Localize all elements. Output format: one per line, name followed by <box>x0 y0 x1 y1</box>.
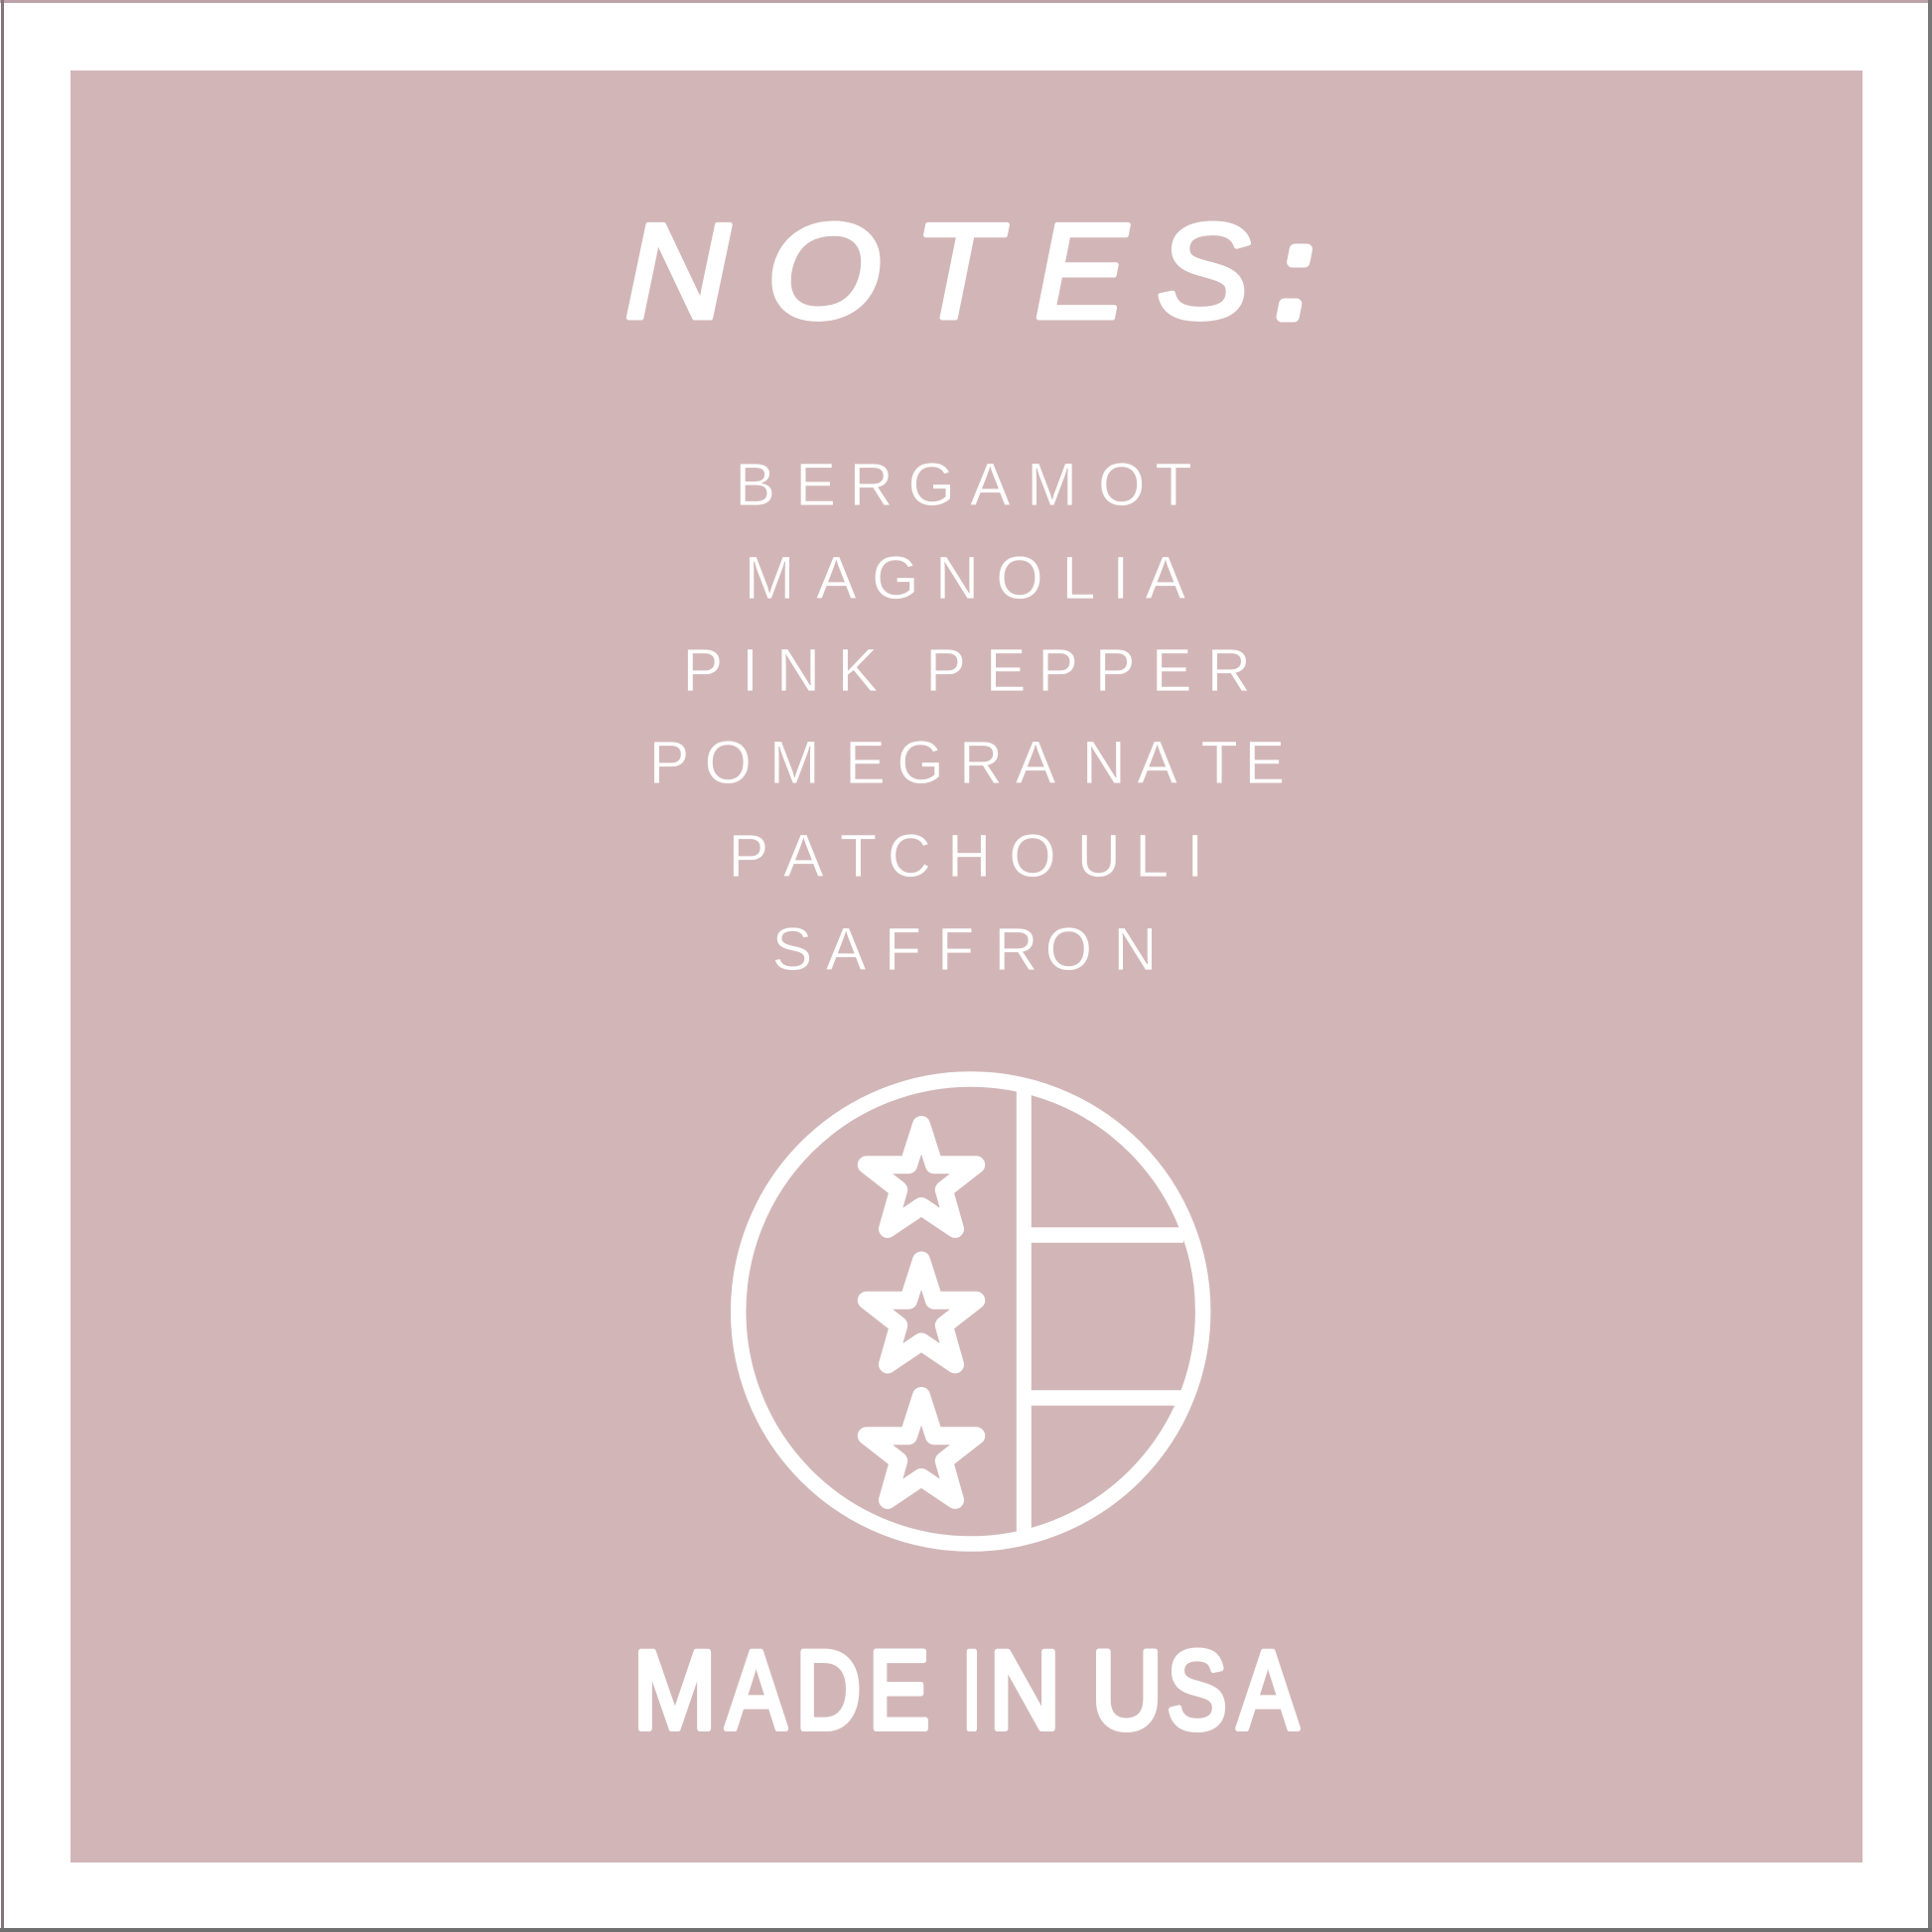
heading: NOTES: : <box>1277 203 1312 345</box>
text block: list of notes: SAFFRON <box>772 915 1157 983</box>
label: MADE IN USA: S <box>1167 1628 1227 1752</box>
heading: NOTES: E <box>1035 196 1128 346</box>
icon: USA flag in a circle <box>739 1079 1203 1544</box>
heading: NOTES: S <box>1157 196 1250 346</box>
label: MADE IN USA: M <box>632 1628 717 1752</box>
text block: list of notes: PATCHOULI <box>729 822 1203 890</box>
heading: NOTES: T <box>913 196 1008 346</box>
text block: list of notes: BERGAMOT <box>735 451 1192 518</box>
label: MADE IN USA: D <box>795 1628 861 1752</box>
label: MADE IN USA: I <box>962 1628 982 1752</box>
text block: list of notes <box>649 451 1285 983</box>
text block: list of notes: PINK PEPPER <box>683 636 1251 704</box>
heading: NOTES: O <box>766 196 882 346</box>
label: MADE IN USA <box>632 1628 1299 1752</box>
label: MADE IN USA: N <box>989 1628 1060 1752</box>
heading: NOTES: N <box>624 196 731 346</box>
label: MADE IN USA: E <box>869 1628 929 1752</box>
label: MADE IN USA: A <box>726 1628 786 1752</box>
label: MADE IN USA: U <box>1091 1628 1163 1752</box>
label: MADE IN USA: A <box>1237 1628 1299 1752</box>
heading: NOTES <box>624 196 1312 346</box>
text block: list of notes: POMEGRANATE <box>649 729 1285 796</box>
text block: list of notes: MAGNOLIA <box>745 544 1185 612</box>
